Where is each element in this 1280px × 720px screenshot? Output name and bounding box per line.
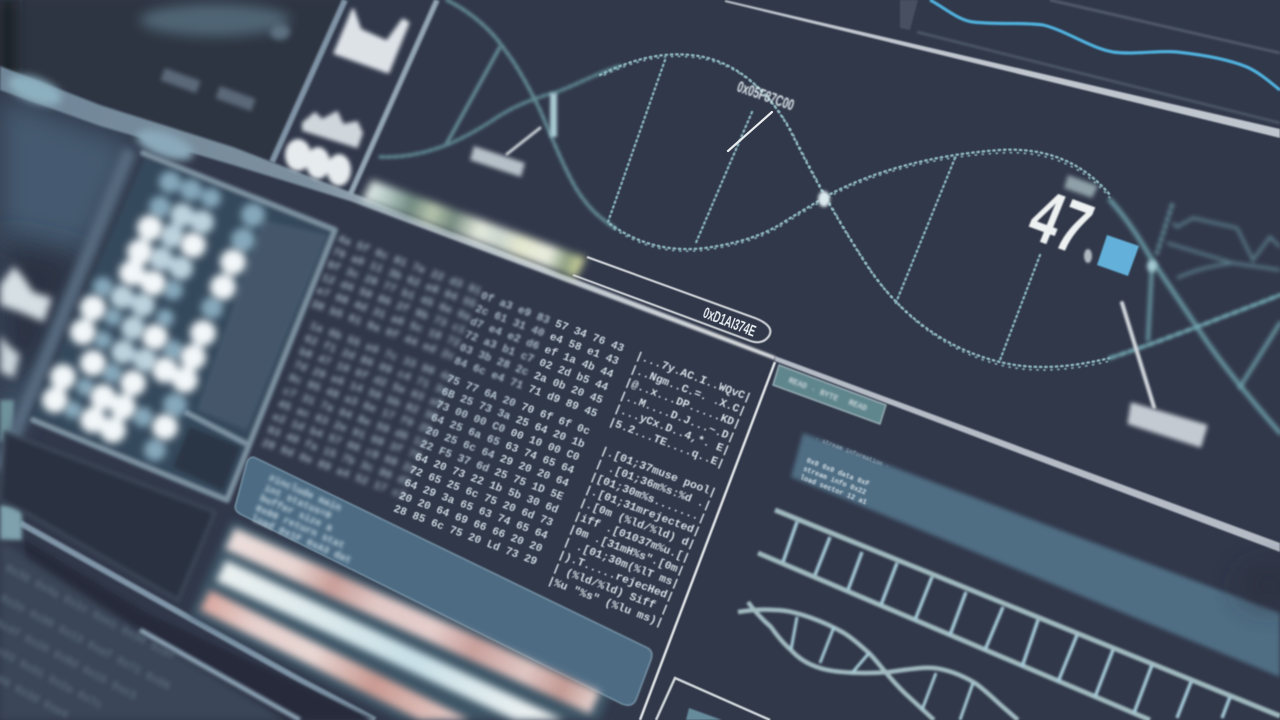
hex block upper right: 71 d9 89 45: [526, 384, 599, 421]
tab label: [773, 365, 886, 424]
panel: dark box under grid: [0, 432, 215, 600]
strand one: [380, 54, 1280, 370]
hex block upper left: 9f 3c 28 77 b1 45 6e 0a: [325, 260, 472, 325]
log rail: [140, 630, 300, 720]
ascii column lower: |.[0m (%ld/%ld) d|: [577, 498, 696, 552]
panel: far left blurred column: [0, 95, 135, 470]
callout: hex address label: [728, 79, 796, 151]
medium value dots: [110, 203, 214, 372]
big percentage stat: [1018, 174, 1139, 276]
bar text: 0x0 0x0 data 0xF: [805, 457, 870, 489]
hex block lower right: 25 64 20 1b: [513, 415, 587, 452]
ascii column upper: |@..x...DP.....KD|: [623, 377, 742, 431]
blurred info text: 0x00 return stat: [253, 504, 346, 552]
hex block upper right: 03 3b 28 2c: [457, 343, 530, 380]
helix node right: [1147, 260, 1157, 272]
inner dark table: [173, 427, 240, 490]
panel: blue info box: [235, 457, 652, 705]
pink bar top: [225, 528, 600, 714]
hex block upper left: 4a 5f 0c 81 7e 22 d3 91: [335, 234, 483, 299]
icon: lower blurred histogram: [0, 335, 20, 378]
ascii column lower: |.[01;31mrejected|: [583, 485, 702, 539]
bar shadow: [1240, 565, 1280, 605]
hex block upper right: 0f a3 e9 83: [478, 291, 552, 328]
callout: lower label: [1122, 303, 1206, 446]
stat label: [1064, 175, 1098, 198]
hex block lower right: 63 74 65 64: [503, 441, 576, 478]
bar text: stream info 0x22: [802, 466, 867, 497]
hex block upper right: e4 58 e1 43: [547, 332, 621, 369]
ascii column upper: [607, 351, 753, 471]
hex block lower right: 25 75 1D 5E: [492, 467, 565, 504]
hex block lower right: 64 25 6a 65: [429, 413, 502, 450]
lower left rail: [20, 523, 375, 720]
hex block lower right: 28 85 6c 75 20 Ld 73 29: [391, 504, 538, 569]
ladder rungs: [783, 522, 1230, 718]
log text: [0, 563, 176, 720]
small bottom panel: [656, 678, 770, 720]
hex block lower left: 45 ac 63 2e 91 08 3f 70: [276, 399, 423, 464]
hex block lower left: 62 f1 2d 86 09 c4 71 3a: [302, 334, 450, 399]
bar text: [798, 457, 874, 507]
helix crossover glow: [818, 191, 830, 207]
ascii column upper: |...7y.AC.I..WQvC|: [633, 351, 753, 405]
lower left teal block: [0, 505, 22, 540]
panel outline: [33, 153, 335, 500]
helix crossover upper: [550, 93, 557, 137]
hex block upper right: 02 2d b5 44: [537, 358, 610, 395]
ascii column lower: |%u "%s" (%lu ms)|: [545, 576, 664, 630]
ascii column upper: |..M....D.J...~.D|: [617, 390, 736, 445]
hex panel right line: [640, 362, 775, 720]
hex block lower left: 93 40 fa 15 7b 3c 86 d1: [265, 425, 412, 490]
left edge teal block: [0, 400, 14, 442]
ascii column lower: [545, 446, 718, 630]
blurred info text: #include main: [266, 473, 343, 515]
log text: 0x30 0x4a 0x1c 0xe1 0x30 0x9f: [3, 563, 176, 663]
strand two: [447, 0, 1280, 433]
hex block upper right: 57 34 76 43: [553, 319, 626, 356]
blurred info text: [249, 473, 370, 567]
panel: sidebar with white icons: [285, 10, 408, 186]
hex block upper right: ef 1a 4b 44: [542, 345, 615, 382]
blurred info text: int status=0: [262, 483, 333, 523]
ascii column lower: | .[01;30m(%lT ms|: [561, 537, 680, 591]
hex block upper right: 84 6c e4 71: [452, 356, 525, 393]
hex block lower left: 28 6d 0e 89 a4 52 17 c3: [260, 438, 407, 503]
sidebar right line: [350, 0, 437, 195]
bar text: load sector 12 a1: [798, 474, 868, 507]
callout: blurred address label: [470, 128, 540, 177]
inner gray table: [197, 220, 328, 430]
hex block upper left: e7 08 4d 31 a6 5c 19 72: [314, 286, 461, 351]
left outer band: [0, 150, 130, 470]
log text: 0x2e 0x90 0x13 0xaf 0x71 0x08: [0, 593, 171, 693]
hex block lower right: 20 25 6c 64: [423, 426, 496, 463]
capsule label text: 0xD1AI374E: [701, 305, 758, 341]
hex block upper left: 12 d4 50 86 2f 9b 73 c1: [320, 273, 467, 338]
progress strip with capsule label: [362, 180, 770, 342]
hex block upper left: [309, 234, 483, 364]
blurred rung left: [447, 47, 500, 143]
hex block lower right: 20 20 64 69 66 66 20 20: [397, 491, 544, 556]
small DNA helix: [738, 602, 1018, 720]
callout: hex address label: 0x05F87C00: [735, 79, 796, 115]
blurred info text: buffer size a: [258, 493, 334, 535]
icon: blurred white histogram: [0, 266, 52, 322]
sidebar left line: [272, 0, 345, 162]
hex block lower left: c7 31 7a 04 8e 59 d6 12: [281, 386, 428, 451]
percent sign: [1084, 249, 1092, 263]
band highlights: [5, 69, 65, 111]
right divider band: [775, 356, 1280, 552]
bar header: · stream information ·: [814, 435, 890, 470]
hex block upper left: 38 b5 61 9a 0f 44 ed 2c: [309, 299, 456, 364]
ascii column lower: |.[01;37muse pool|: [598, 446, 718, 500]
hex block upper right: 72 a3 b1 c7: [463, 330, 535, 367]
faint graph right: [1167, 218, 1280, 278]
ascii column lower: |0m .[31mH%s".[0m|: [567, 524, 686, 578]
hex block upper right: d7 e4 e2 d6: [468, 317, 541, 354]
icon: three white dots: [285, 139, 351, 186]
blue indicator: [1097, 235, 1139, 276]
hex block upper right: 2c 61 31 40: [473, 304, 546, 340]
panel: status bar backing: [190, 520, 612, 720]
status bars: [200, 528, 600, 720]
hex block lower left: e2 1d b4 57 06 c9 68 2a: [270, 412, 418, 477]
capsule outline: [573, 257, 770, 342]
hex block lower right: 29 20 20 64: [497, 454, 571, 491]
tab text right: READ: [847, 398, 868, 414]
hex block lower right: 73 00 00 C0: [434, 400, 507, 437]
icon: white silhouette chart: [335, 10, 408, 72]
hex block lower right: 64 20 73 22 1b 5b 30 6d: [413, 452, 560, 517]
lower left dark strip: [25, 540, 375, 720]
ascii column lower: |[01;30m%s.......|: [588, 472, 707, 526]
hex block lower right: 70 6f 6f 0c: [519, 402, 592, 439]
band junction highlight: [133, 123, 197, 167]
ascii column upper: |...yCx.D..4,*. E|: [612, 403, 731, 458]
panel: bottom left blurred log: [0, 540, 300, 720]
icon: small silhouette chart: [303, 112, 362, 147]
panel: left value grid: [30, 153, 335, 500]
ascii column upper: |..Ngm..C.=. .X.C|: [628, 364, 747, 418]
dim value dots: [64, 171, 265, 461]
hex block upper right: [452, 291, 626, 421]
panel: upper left blurred readouts: [0, 0, 345, 165]
top right chart with blue line: [900, 0, 1280, 123]
ascii column upper: |5.2...TE....q..E|: [607, 417, 726, 471]
pink bar bottom: [200, 590, 470, 720]
hex block lower left: [260, 321, 455, 503]
hex block lower right: 22 F5 37 6d: [418, 439, 491, 476]
ascii column lower: |iff .[01037m%u.[|: [572, 511, 691, 565]
hex block lower right: 6B 25 73 3a: [439, 387, 512, 424]
hex block lower right: 75 77 6A 20: [444, 374, 517, 410]
hex block lower right: 64 29 3a 65 63 74 65 64: [402, 478, 549, 543]
bright value dots: [42, 215, 246, 443]
hex block lower right: 00 10 00 C0: [508, 428, 581, 465]
ascii column lower: | .[01;36m%s:%d .|: [593, 459, 712, 513]
top right divider: [725, 0, 1280, 138]
base pair rungs: [608, 60, 1040, 360]
hex block lower right: [391, 374, 592, 569]
tab text left: READ · BYTE: [787, 376, 839, 404]
hex block lower left: 0c 95 48 a3 6e 17 f0 2b: [286, 373, 434, 438]
main divider band: [0, 66, 775, 360]
ascii column lower: |).T.....rejecHed|: [556, 550, 675, 604]
ladder chart: [758, 510, 1280, 720]
small panel tab: [686, 708, 722, 720]
hex block lower left: 1a 0b 55 e0 7c 33 98 4e: [307, 321, 455, 386]
ladder rails: [758, 510, 1280, 720]
hex block lower right: 72 65 25 6c 75 20 6d 73: [407, 465, 555, 530]
hex block lower left: 7d 29 e6 14 50 bb 82 36: [292, 360, 439, 425]
blue data bar: [791, 433, 1280, 677]
ascii column lower: | (%ld/%ld) Siff |: [551, 563, 670, 617]
DNA helix main: [380, 0, 1280, 433]
hex block upper right: 2a 0b 20 45: [531, 371, 605, 408]
hex block lower left: b8 47 10 6f d2 5e 03 a9: [297, 347, 444, 412]
stat number: 47: [1018, 174, 1103, 271]
panel: hex dump: [260, 234, 753, 630]
blurred info text: load 0x1F 0xA3 dat: [249, 513, 353, 567]
white bar middle: [216, 560, 564, 720]
hex block upper left: 76 a0 11 3b 62 e8 04 55: [330, 247, 478, 312]
